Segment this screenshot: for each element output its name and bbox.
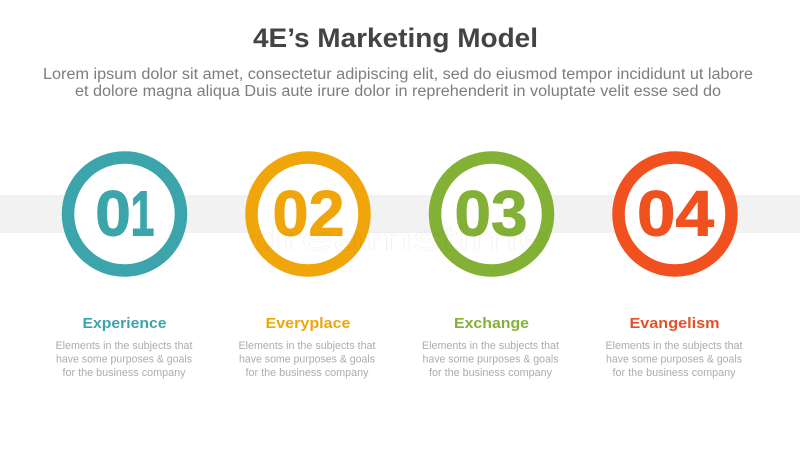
intro text: Lorem ipsum dolor sit amet, consectetur adipiscing elit, sed do eiusmod tempor incididunt ut labore: [43, 66, 753, 83]
step 1 text: experience: have some purposes & goals: [56, 354, 192, 366]
step 4 text: evangelism: for the business company: [612, 367, 736, 379]
step 2 text: everyplace: have some purposes & goals: [239, 354, 375, 366]
intro text: [43, 66, 753, 100]
step 2 text: everyplace: [238, 315, 376, 379]
step 4 text: evangelism: Elements in the subjects that: [606, 340, 742, 352]
step 3: exchange circle: 03: [454, 178, 528, 250]
watermark: dreamstime: [250, 220, 550, 258]
step 3 text: exchange: Elements in the subjects that: [422, 340, 559, 352]
step 2 text: everyplace: for the business company: [246, 367, 369, 379]
step 1 text: experience: Experience: [82, 315, 166, 332]
step 1: experience circle: 1: [130, 178, 154, 250]
step 3 text: exchange: for the business company: [429, 367, 552, 379]
step 3 text: exchange: Exchange: [454, 315, 529, 332]
horizontal band: [0, 195, 800, 233]
step 1 text: experience: Elements in the subjects that: [56, 340, 192, 352]
step 1: experience circle: 0: [95, 178, 131, 250]
step 3 text: exchange: have some purposes & goals: [422, 354, 559, 366]
step 3: exchange circle: [435, 158, 548, 270]
step 4 text: evangelism: [606, 315, 742, 379]
step 2 text: everyplace: Elements in the subjects that: [238, 340, 376, 352]
step 1 text: experience: for the business company: [62, 367, 186, 379]
step 4: evangelism circle: [618, 158, 732, 270]
step 1: experience circle: [68, 158, 181, 270]
intro text: et dolore magna aliqua Duis aute irure dolor in reprehenderit in voluptate velit esse sed do: [75, 83, 721, 100]
title: 4E’s Marketing Model: [253, 23, 538, 53]
step 4 text: evangelism: Evangelism: [630, 315, 720, 332]
step 4: evangelism circle: 04: [637, 178, 714, 250]
step 1 text: experience: [56, 315, 192, 379]
step 2 text: everyplace: Everyplace: [266, 315, 350, 332]
step 3 text: exchange: [422, 315, 559, 379]
step 2: everyplace circle: [252, 158, 364, 270]
step 2: everyplace circle: 02: [272, 178, 344, 250]
step 4 text: evangelism: have some purposes & goals: [606, 354, 742, 366]
